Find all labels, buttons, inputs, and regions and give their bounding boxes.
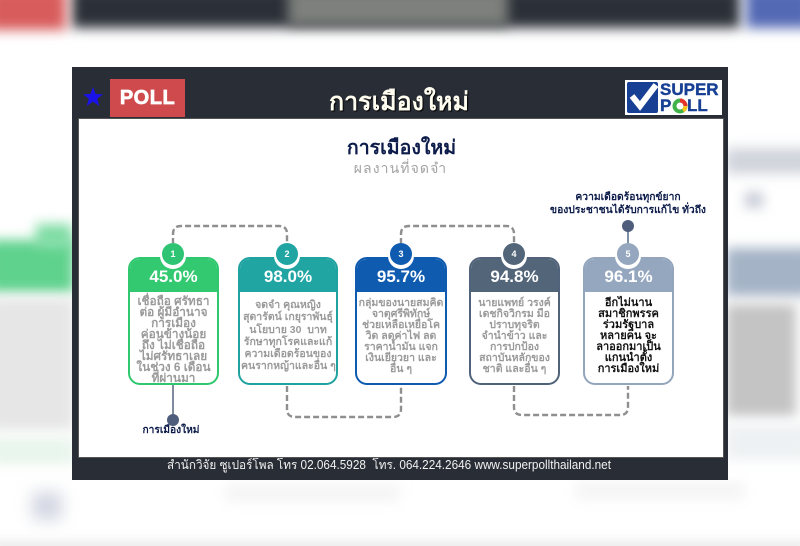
card 4 text: ปราบทุจริต	[489, 319, 540, 331]
card 1 text: การเมือง	[151, 316, 196, 330]
card 3 text: ช่วยเหลือเหยื่อโค	[362, 319, 440, 331]
card 5 value	[585, 259, 672, 292]
card 4 value	[471, 259, 558, 292]
POLL badge: POLL	[120, 87, 175, 109]
card 1 text: ต่อ ผู้มีอำนาจ	[139, 305, 208, 319]
header title: การเมืองใหม่	[329, 88, 469, 116]
callout above card 5	[550, 191, 706, 216]
card 1 text: ค่อนข้างน้อย	[141, 327, 206, 341]
card 4	[469, 257, 560, 385]
card 2 value	[240, 259, 336, 292]
Super Poll logo	[625, 80, 722, 115]
card 5 number badge	[617, 243, 639, 265]
card 3 text: กลุ่มของนายสมคิด	[359, 297, 443, 309]
card 1 text: ที่ผ่านมา	[152, 371, 195, 385]
card 5 text: ร่วมรัฐบาล	[603, 319, 654, 331]
card 4 number badge	[503, 243, 525, 265]
card 1 number badge	[162, 243, 184, 265]
card 4 text: จำนำข้าว และ	[482, 330, 547, 342]
card 2 text: ความเดือดร้อนของ	[244, 348, 332, 360]
card 1	[128, 257, 219, 385]
white content panel	[79, 119, 723, 457]
card 2 text	[241, 299, 336, 372]
card 1 text: ไม่ศรัทธาเลย	[140, 349, 207, 363]
card 1 text	[136, 292, 211, 385]
icon: multicolour O	[672, 98, 688, 114]
card 2	[238, 257, 338, 385]
card 4 text: ชาติ และอื่น ๆ	[483, 363, 546, 375]
logo word P: P	[660, 96, 671, 115]
card 4 text: การปกป้อง	[490, 341, 539, 353]
card 2 text: สุดารัตน์ เกยุราพันธุ์	[243, 311, 333, 323]
card 3 text: อื่น ๆ	[390, 363, 412, 375]
card 4 text: เดชกิจวิกรม มือ	[479, 308, 550, 320]
card 3 text: ราคาน้ำมัน แจก	[364, 341, 438, 353]
card 1 text: ถึง ไม่เชื่อถือ	[142, 338, 205, 352]
card 3 number badge: 3	[398, 249, 404, 259]
card 4 value: 94.8%	[490, 267, 539, 286]
card 3 text: วิด ลดค่าไฟ ลด	[366, 330, 436, 342]
card 2 value: 98.0%	[264, 267, 312, 286]
card 2 text: คนรากหญ้าและอื่น ๆ	[241, 360, 336, 372]
card 2 text: นโยบาย 30 บาท	[249, 324, 327, 336]
card 4 text: สถาบันหลักของ	[479, 352, 550, 364]
card 3 value	[357, 259, 445, 292]
icon: check mark box	[627, 82, 658, 113]
panel subheading: ผลงานที่จดจำ	[354, 160, 447, 176]
card 5 text: การเมืองใหม่	[598, 363, 659, 375]
label under card 1: การเมืองใหม่	[142, 425, 200, 436]
card 3	[355, 257, 447, 385]
card 3 number badge	[390, 243, 412, 265]
card 5	[583, 257, 674, 385]
card 5 text: แกนนำตั้ง	[605, 352, 652, 364]
logo word SUPER: SUPER	[660, 80, 719, 99]
card 3 text: จาตุศรีพิทักษ์	[372, 308, 430, 320]
card 4 text: นายแพทย์ วรงค์	[478, 297, 551, 309]
card 2 number badge	[276, 243, 298, 265]
footer contact line: สำนักวิจัย ซูเปอร์โพล โทร 02.064.5928 โทร. 064.224.2646 www.superpollthailand.net	[167, 458, 611, 472]
card 3 value: 95.7%	[377, 267, 425, 286]
card 5 text: ลาออกมาเป็น	[596, 341, 661, 353]
card 2 number badge: 2	[284, 249, 290, 259]
card 1 value	[130, 259, 217, 292]
callout above card 5: ของประชาชนได้รับการแก้ไข ทั่วถึง	[550, 205, 706, 216]
card 2 text: รักษาทุกโรคและแก้	[244, 336, 332, 348]
card 5 text: อีกไม่นาน	[605, 297, 652, 309]
card 1 number badge: 1	[170, 249, 176, 259]
card 5 number badge: 5	[625, 249, 630, 259]
card 4 text	[478, 296, 551, 375]
card 1 value: 45.0%	[149, 267, 198, 286]
card 1 text: เชื่อถือ ศรัทธา	[137, 294, 210, 308]
card 5 text: สมาชิกพรรค	[598, 308, 659, 320]
card 5 text	[596, 296, 661, 375]
panel heading: การเมืองใหม่	[347, 137, 456, 159]
card 1 text: ในช่วง 6 เดือน	[136, 360, 211, 374]
card 3 text	[359, 297, 443, 375]
main framed slide	[72, 67, 728, 480]
callout above card 5: ความเดือดร้อนทุกข์ยาก	[575, 192, 681, 203]
card 4 number badge: 4	[511, 249, 516, 259]
card 2 text: จดจำ คุณหญิง	[255, 299, 321, 311]
card 5 value: 96.1%	[604, 267, 653, 286]
card 5 text: หลายคน จะ	[600, 330, 657, 342]
card 3 text: เงินเยียวยา และ	[365, 352, 437, 364]
logo word LL: LL	[687, 96, 708, 115]
POLL badge	[110, 79, 185, 117]
icon: blue star	[83, 87, 103, 106]
